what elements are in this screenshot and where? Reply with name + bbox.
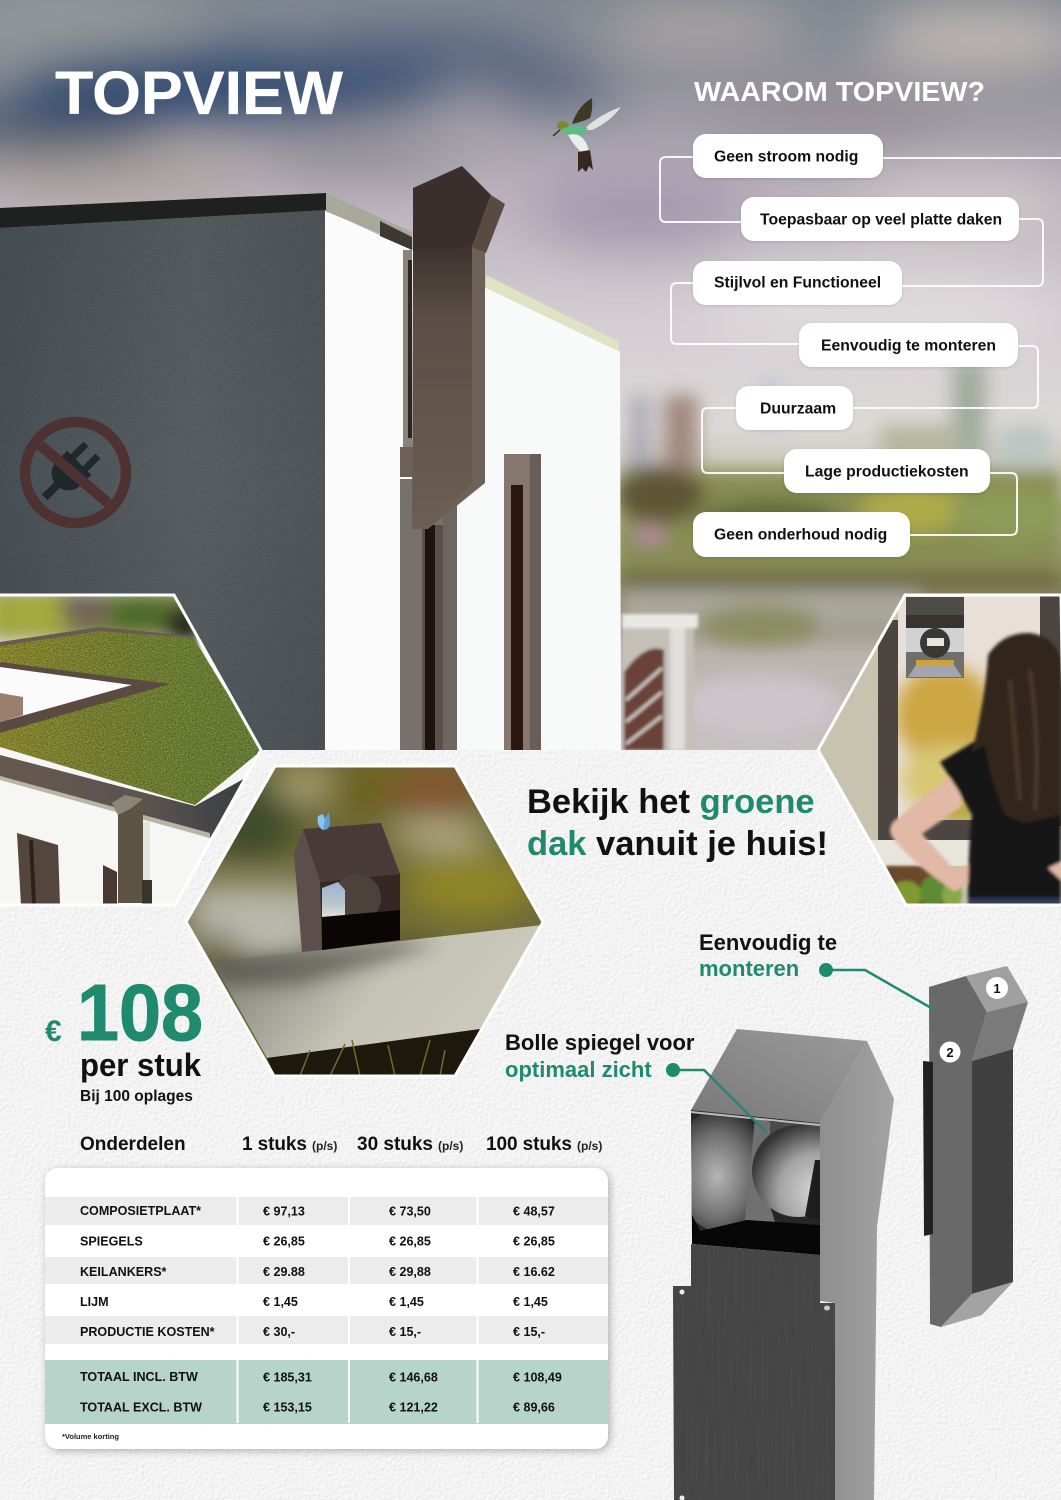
price block: Bij 100 oplages	[80, 1088, 193, 1105]
benefit: toepasbaar op veel platte daken: Toepasbaar op veel platte daken	[760, 212, 1002, 228]
hexagon photo: woman at window	[818, 590, 1061, 910]
window frame	[878, 596, 1061, 840]
row: totaal incl btw	[80, 1370, 562, 1384]
row: lijm: € 1,45	[263, 1295, 298, 1309]
inset: mirror view	[906, 597, 964, 678]
row: totaal excl btw: € 89,66	[513, 1400, 555, 1414]
product: topview device on wall	[412, 166, 505, 529]
callout: eenvoudig te monteren: Eenvoudig te	[699, 930, 837, 955]
row: spiegels: SPIEGELS	[80, 1234, 143, 1248]
large product render	[670, 1029, 894, 1500]
row: totaal incl btw: € 108,49	[513, 1370, 562, 1384]
row: composietplaat: € 48,57	[513, 1204, 555, 1218]
table row shading	[45, 1197, 608, 1424]
price block: per stuk	[80, 1047, 201, 1083]
right window	[504, 454, 541, 750]
callout: bolle spiegel: optimaal zicht	[505, 1057, 652, 1082]
row: totaal excl btw: € 153,15	[263, 1400, 312, 1414]
benefit: geen onderhoud nodig	[693, 512, 910, 557]
row: productie kosten: € 15,-	[389, 1325, 421, 1339]
benefit: duurzaam: Duurzaam	[760, 400, 836, 418]
row: composietplaat: COMPOSIETPLAAT*	[80, 1204, 201, 1218]
heading: bekijk het groene dak: Bekijk het groene	[527, 783, 815, 821]
woman	[890, 633, 1061, 906]
benefit: stijlvol en functioneel: Stijlvol en Functioneel	[714, 274, 881, 292]
table header: (p/s)	[312, 1139, 337, 1153]
building: right white wall	[412, 250, 621, 750]
icon: no power plug	[25, 422, 126, 523]
benefit: eenvoudig te monteren: Eenvoudig te monteren	[821, 338, 996, 354]
icon: hummingbird	[553, 98, 621, 172]
table header: 100 stuks	[486, 1134, 572, 1155]
row: keilankers: KEILANKERS*	[80, 1265, 167, 1279]
small background building with shutter	[622, 614, 698, 750]
row: composietplaat: € 97,13	[263, 1204, 305, 1218]
callout: eenvoudig te monteren	[699, 930, 933, 1009]
callout: bolle spiegel: Bolle spiegel voor	[505, 1030, 695, 1055]
badge 1	[986, 977, 1008, 999]
row: lijm: LIJM	[80, 1295, 109, 1309]
hexagon photo: device on wall	[180, 760, 550, 1080]
benefits list	[693, 134, 1019, 557]
table header: Onderdelen	[80, 1134, 186, 1155]
heading: bekijk het groene dak: dak vanuit je huis!	[527, 825, 828, 863]
mirror opening	[691, 1110, 820, 1255]
table header: (p/s)	[438, 1139, 463, 1153]
footnote: *Volume korting	[62, 1432, 119, 1441]
hexagon photo: green roof	[0, 590, 270, 910]
plants	[886, 866, 962, 910]
row: lijm: € 1,45	[513, 1295, 548, 1309]
small device	[112, 795, 152, 904]
heading: waarom topview: WAAROM TOPVIEW?	[694, 76, 985, 107]
row: spiegels: € 26,85	[263, 1234, 305, 1248]
benefit: geen onderhoud nodig: Geen onderhoud nodig	[714, 526, 887, 544]
building: front white wall and trim	[325, 193, 412, 750]
row: productie kosten: € 15,-	[513, 1325, 545, 1339]
table header	[80, 1134, 602, 1155]
window slit under device	[400, 250, 457, 750]
building: dark wall	[0, 193, 330, 755]
row: totaal excl btw	[80, 1400, 555, 1414]
benefit: toepasbaar op veel platte daken	[741, 197, 1019, 241]
hero background: blurred sky and city	[0, 0, 1061, 760]
benefit: lage productiekosten: Lage productiekosten	[805, 464, 969, 480]
row: spiegels: € 26,85	[513, 1234, 555, 1248]
row: keilankers	[80, 1265, 555, 1279]
row: productie kosten: € 30,-	[263, 1325, 295, 1339]
row: keilankers: € 16.62	[513, 1265, 555, 1279]
row: keilankers: € 29,88	[389, 1265, 431, 1279]
row: lijm: € 1,45	[389, 1295, 424, 1309]
badge 2: 2	[946, 1045, 954, 1060]
table header: 1 stuks	[242, 1134, 307, 1155]
row: totaal excl btw: TOTAAL EXCL. BTW	[80, 1400, 202, 1414]
row: totaal incl btw: TOTAAL INCL. BTW	[80, 1370, 198, 1384]
small product render	[923, 966, 1028, 1327]
row: totaal incl btw: € 146,68	[389, 1370, 438, 1384]
benefit: duurzaam	[736, 386, 853, 430]
row: composietplaat	[80, 1204, 555, 1218]
row: lijm	[80, 1295, 548, 1309]
device	[294, 823, 400, 952]
row: totaal excl btw: € 121,22	[389, 1400, 438, 1414]
benefit: stijlvol en functioneel	[693, 261, 902, 305]
title: TOPVIEW	[55, 59, 343, 127]
badge 2	[940, 1042, 960, 1062]
paper background	[0, 745, 1061, 1500]
row: productie kosten	[80, 1325, 545, 1339]
callout: bolle spiegel	[505, 1030, 767, 1133]
price table card	[45, 1168, 608, 1449]
connector lines between benefits	[660, 157, 1061, 535]
table header: 30 stuks	[357, 1134, 433, 1155]
table header: (p/s)	[577, 1139, 602, 1153]
front panel	[670, 1240, 840, 1500]
icon: butterfly	[318, 812, 330, 830]
heading: bekijk het groene dak	[527, 783, 828, 863]
benefit: eenvoudig te monteren	[799, 323, 1018, 367]
benefit: lage productiekosten	[784, 449, 990, 493]
row: spiegels	[80, 1234, 555, 1248]
benefit: geen stroom nodig	[693, 134, 883, 178]
row: spiegels: € 26,85	[389, 1234, 431, 1248]
row: totaal incl btw: € 185,31	[263, 1370, 312, 1384]
badge 1: 1	[993, 981, 1001, 996]
window glass	[895, 596, 1040, 826]
row: productie kosten: PRODUCTIE KOSTEN*	[80, 1325, 215, 1339]
row: composietplaat: € 73,50	[389, 1204, 431, 1218]
price block: €	[45, 1015, 62, 1048]
callout: eenvoudig te monteren: monteren	[699, 956, 799, 981]
benefit: geen stroom nodig: Geen stroom nodig	[714, 148, 858, 166]
price block: 108	[77, 968, 203, 1057]
price block	[45, 968, 203, 1105]
row: keilankers: € 29.88	[263, 1265, 305, 1279]
